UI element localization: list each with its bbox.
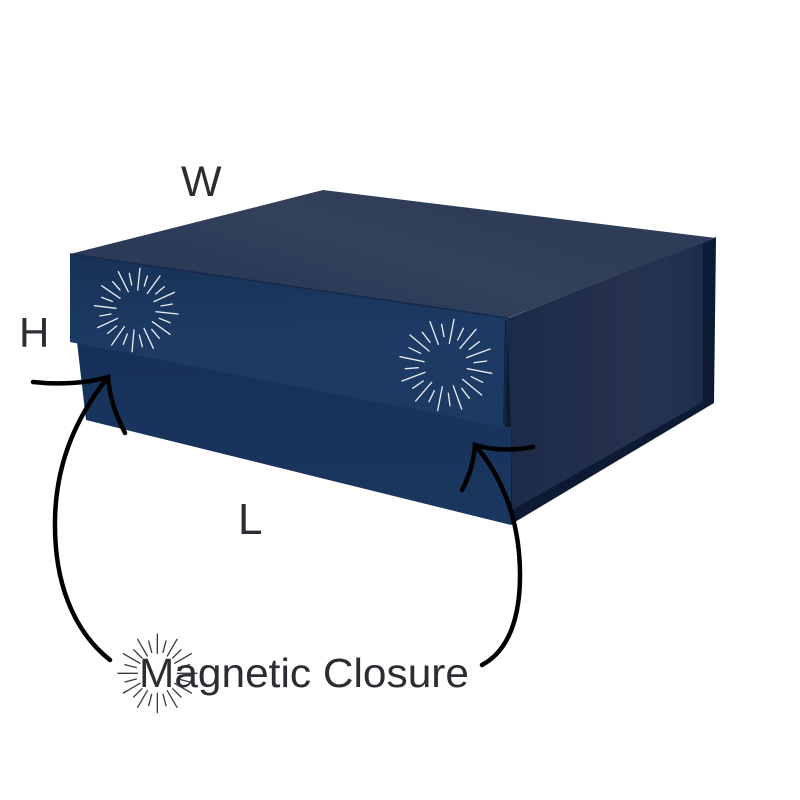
box right side frame <box>505 237 716 525</box>
label: height: H <box>19 309 49 356</box>
arrow: right magnetic closure <box>462 445 533 665</box>
icon: white sunburst left <box>94 268 178 352</box>
gift box <box>70 190 716 525</box>
caption: magnetic closure: Magnetic Closure <box>139 650 469 696</box>
box lid front <box>70 254 508 427</box>
label: length: L <box>238 495 262 544</box>
box right side panel <box>507 243 703 510</box>
box lid top <box>70 190 716 318</box>
lid edge shading <box>70 254 508 318</box>
box base front <box>77 342 511 525</box>
label: width: W <box>181 158 222 206</box>
arrow: left magnetic closure <box>33 377 125 660</box>
icon: dark sunburst <box>118 634 197 713</box>
icon: white sunburst right <box>400 319 492 411</box>
